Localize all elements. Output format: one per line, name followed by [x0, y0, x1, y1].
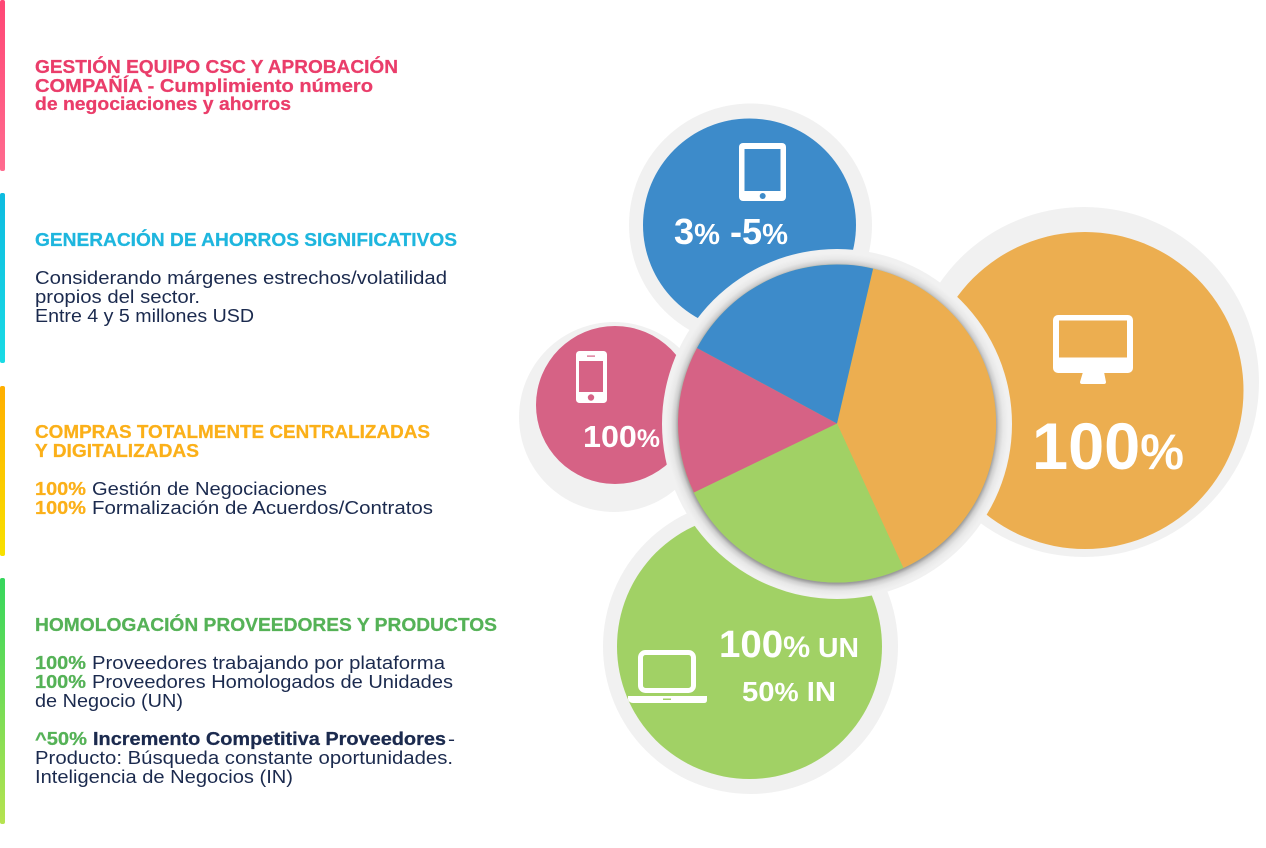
heading: gestión equipo: [35, 56, 398, 114]
text block: ahorros: Entre 4 y 5 millones USD: [35, 306, 254, 326]
value: 100% UN: 100% UN: [719, 624, 859, 666]
heading: homologación: HOMOLOGACIÓN PROVEEDORES Y PRODUCTOS: [35, 614, 497, 635]
heading: gestión equipo: GESTIÓN EQUIPO CSC Y APROBACIÓN: [35, 56, 398, 77]
panel: gestión equipo: [0, 0, 398, 171]
value: pink: 100%: [583, 419, 660, 454]
heading: gestión equipo: de negociaciones y ahorros: [35, 94, 291, 114]
slice: pink: [678, 348, 837, 492]
text block: incremento: Incremento Competitiva Proveedores: [93, 729, 446, 749]
value: orange: 100%: [1032, 409, 1184, 483]
text block: compras: 100%: [35, 498, 86, 518]
icon: laptop: [628, 652, 707, 703]
text block: ahorros: Considerando márgenes estrechos/volatilidad: [35, 268, 447, 288]
panel: homologación: [0, 578, 497, 824]
bar: pink: [0, 0, 5, 171]
text block: proveedores: Proveedores Homologados de Unidades: [92, 672, 453, 692]
text block: compras: 100%: [35, 479, 86, 499]
text block: incremento: Inteligencia de Negocios (IN): [35, 767, 293, 787]
bar: cyan: [0, 193, 5, 363]
icon: tablet: [739, 143, 786, 201]
text block: ahorros: [35, 268, 447, 326]
text block: compras: Gestión de Negociaciones: [92, 479, 327, 499]
bar: amber: [0, 386, 5, 556]
bubble: blue: [629, 104, 872, 346]
pie chart: [662, 249, 1012, 599]
text block: proveedores: [35, 653, 453, 711]
text block: ahorros: propios del sector.: [35, 287, 200, 307]
text block: compras: Formalización de Acuerdos/Contratos: [92, 498, 433, 518]
heading: generación de ahorros: GENERACIÓN DE AHORROS SIGNIFICATIVOS: [35, 229, 457, 250]
value: blue: 3% -5%: [674, 211, 788, 252]
heading: compras centralizadas: Y DIGITALIZADAS: [35, 441, 199, 461]
text block: compras: [35, 479, 433, 518]
text block: incremento: ^50%: [35, 729, 87, 749]
bubble: green: [603, 499, 898, 794]
text block: incremento: [35, 729, 455, 787]
panel: compras centralizadas: [0, 386, 433, 556]
text block: incremento: Producto: Búsqueda constante oportunidades.: [35, 748, 453, 768]
panel: generación de ahorros: [0, 193, 457, 363]
icon: monitor: [1053, 315, 1133, 384]
icon: phone: [576, 351, 607, 403]
value: 50% IN: 50% IN: [742, 676, 836, 707]
slice: blue: [697, 264, 873, 424]
heading: gestión equipo: COMPAÑÍA - Cumplimiento número: [35, 75, 373, 96]
heading: compras centralizadas: [35, 422, 430, 461]
bubble: pink: [519, 322, 709, 512]
slice: green: [694, 424, 903, 582]
bar: green: [0, 578, 5, 824]
slice: orange: [837, 269, 996, 568]
heading: compras centralizadas: COMPRAS TOTALMENTE CENTRALIZADAS: [35, 422, 430, 442]
text block: proveedores: Proveedores trabajando por plataforma: [92, 653, 446, 673]
text block: proveedores: 100%: [35, 653, 86, 673]
bubble: orange: [909, 207, 1259, 557]
text block: proveedores: 100%: [35, 672, 86, 692]
text block: incremento: -: [448, 729, 455, 749]
text block: proveedores: de Negocio (UN): [35, 691, 183, 711]
